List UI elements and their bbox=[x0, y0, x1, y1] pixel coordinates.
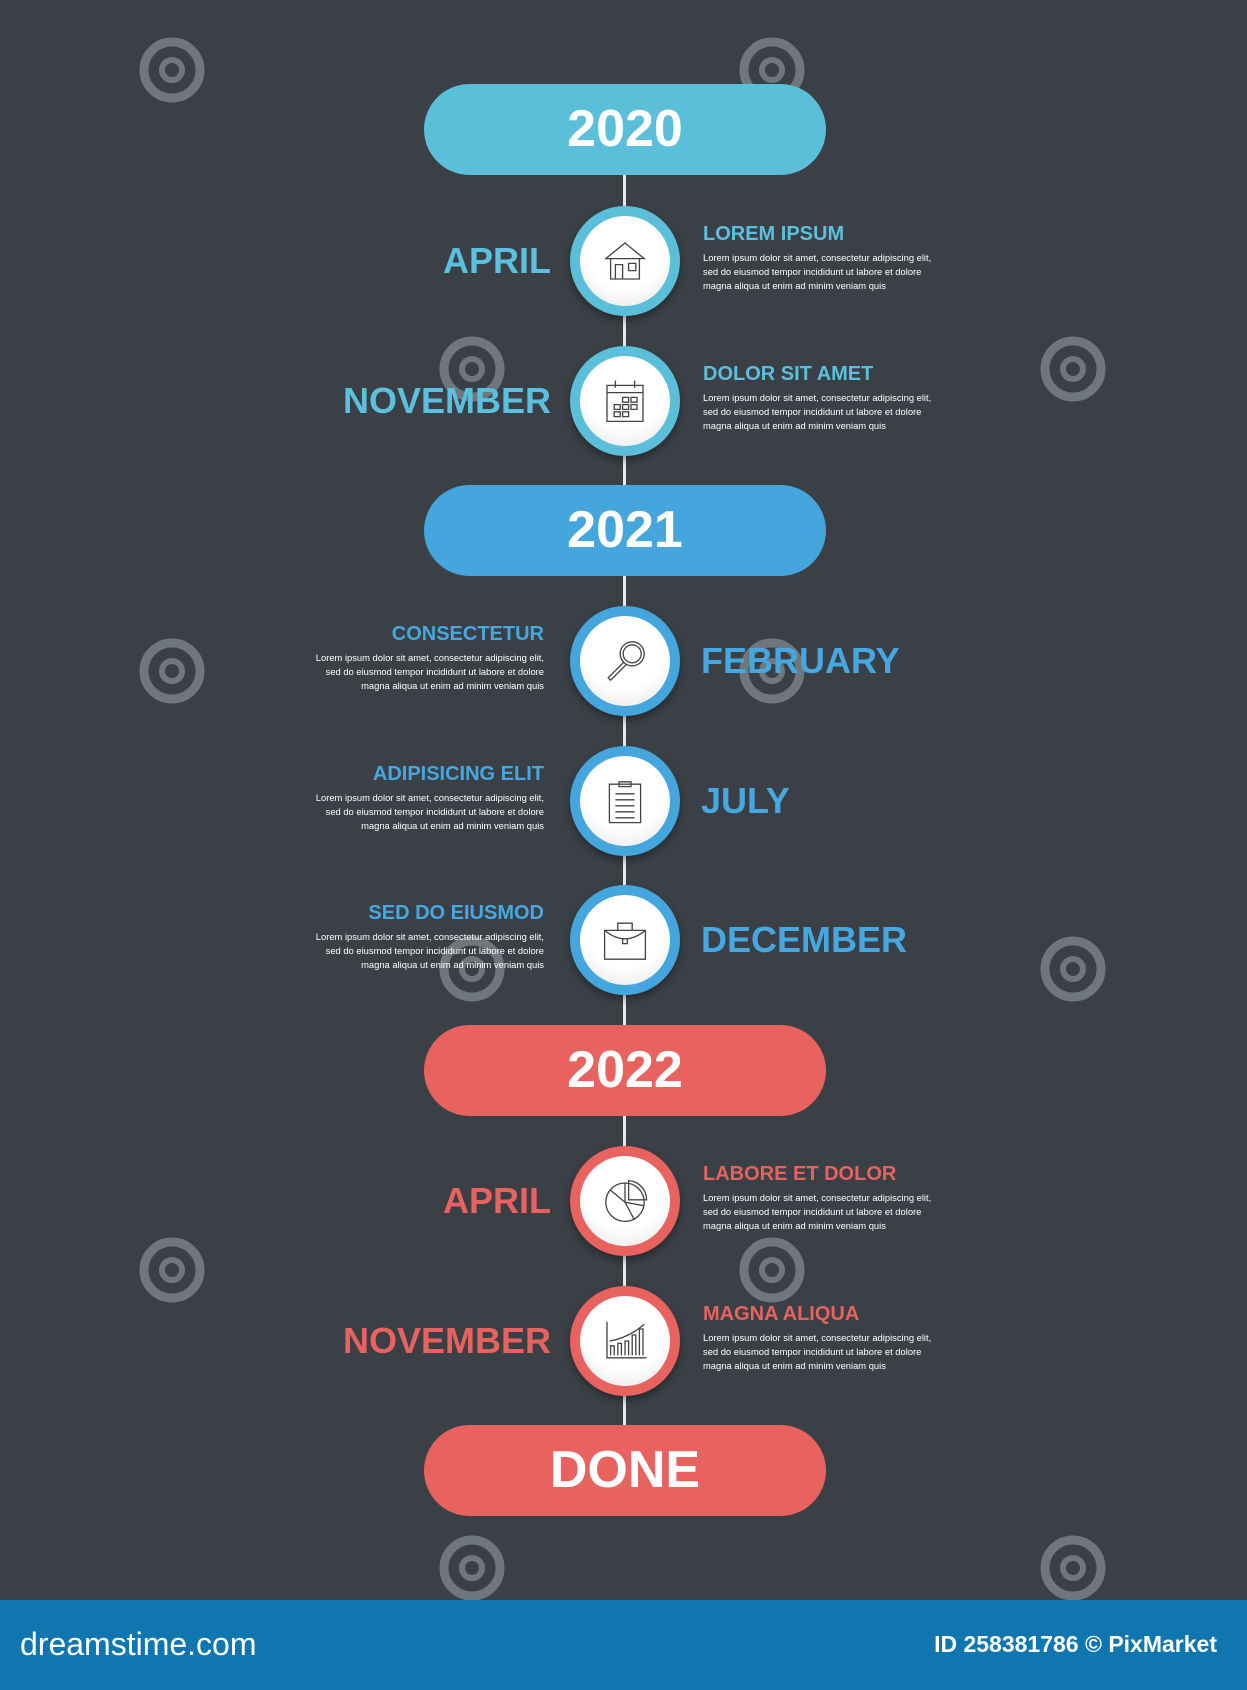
month: april 2022: APRIL bbox=[443, 1180, 551, 1221]
icon circle: clipboard bbox=[570, 746, 680, 856]
done pill bbox=[424, 1425, 826, 1516]
text: adipisicing elit: Lorem ipsum dolor sit amet, consectetur adipiscing elit, bbox=[316, 792, 544, 803]
text: adipisicing elit: sed do eiusmod tempor incididunt ut labore et dolore bbox=[326, 806, 544, 817]
text: dolor sit amet: DOLOR SIT AMET bbox=[703, 363, 873, 385]
footer id: ID 258381786 © PixMarket bbox=[934, 1631, 1217, 1657]
year pill 2022: 2022 bbox=[567, 1041, 683, 1099]
month: november 2020: NOVEMBER bbox=[343, 380, 551, 421]
month: february: FEBRUARY bbox=[701, 640, 900, 681]
text: labore et dolor bbox=[703, 1163, 931, 1231]
month: november 2022: NOVEMBER bbox=[343, 1320, 551, 1361]
year pill 2020: 2020 bbox=[567, 100, 683, 158]
done pill: DONE bbox=[550, 1441, 700, 1499]
month: december: DECEMBER bbox=[701, 919, 907, 960]
text: adipisicing elit: magna aliqua ut enim ad minim veniam quis bbox=[361, 820, 544, 831]
icon circle: magnifier bbox=[570, 606, 680, 716]
text: sed do eiusmod: magna aliqua ut enim ad minim veniam quis bbox=[361, 959, 544, 970]
text: magna aliqua bbox=[703, 1303, 931, 1371]
text: magna aliqua: Lorem ipsum dolor sit amet, consectetur adipiscing elit, bbox=[703, 1332, 931, 1343]
text: sed do eiusmod: Lorem ipsum dolor sit amet, consectetur adipiscing elit, bbox=[316, 931, 544, 942]
icon circle: house bbox=[570, 206, 680, 316]
text: lorem ipsum: magna aliqua ut enim ad minim veniam quis bbox=[703, 280, 886, 291]
text: labore et dolor: magna aliqua ut enim ad minim veniam quis bbox=[703, 1220, 886, 1231]
text: consectetur bbox=[316, 623, 544, 691]
text: dolor sit amet bbox=[703, 363, 931, 431]
month: july: JULY bbox=[701, 780, 790, 821]
text: sed do eiusmod: SED DO EIUSMOD bbox=[368, 902, 544, 924]
text: labore et dolor: LABORE ET DOLOR bbox=[703, 1163, 896, 1185]
text: magna aliqua: sed do eiusmod tempor incididunt ut labore et dolore bbox=[703, 1346, 921, 1357]
text: sed do eiusmod: sed do eiusmod tempor incididunt ut labore et dolore bbox=[326, 945, 544, 956]
year pill 2022 bbox=[424, 1025, 826, 1116]
icon circle: growth chart bbox=[570, 1286, 680, 1396]
text: lorem ipsum: sed do eiusmod tempor incididunt ut labore et dolore bbox=[703, 266, 921, 277]
footer logo: dreamstime.com bbox=[20, 1626, 256, 1662]
text: consectetur: sed do eiusmod tempor incididunt ut labore et dolore bbox=[326, 666, 544, 677]
year pill 2021: 2021 bbox=[567, 501, 683, 559]
timeline line bbox=[623, 150, 626, 1450]
text: consectetur: Lorem ipsum dolor sit amet, consectetur adipiscing elit, bbox=[316, 652, 544, 663]
text: magna aliqua: MAGNA ALIQUA bbox=[703, 1303, 859, 1325]
year pill 2021 bbox=[424, 485, 826, 576]
text: consectetur: CONSECTETUR bbox=[392, 623, 544, 645]
text: lorem ipsum: LOREM IPSUM bbox=[703, 223, 844, 245]
text: labore et dolor: Lorem ipsum dolor sit amet, consectetur adipiscing elit, bbox=[703, 1192, 931, 1203]
text: lorem ipsum bbox=[703, 223, 931, 291]
text: consectetur: magna aliqua ut enim ad minim veniam quis bbox=[361, 680, 544, 691]
icon circle: briefcase bbox=[570, 885, 680, 995]
text: dolor sit amet: sed do eiusmod tempor incididunt ut labore et dolore bbox=[703, 406, 921, 417]
text: adipisicing elit: ADIPISICING ELIT bbox=[373, 763, 544, 785]
text: adipisicing elit bbox=[316, 763, 544, 831]
text: labore et dolor: sed do eiusmod tempor incididunt ut labore et dolore bbox=[703, 1206, 921, 1217]
icon circle: pie chart bbox=[570, 1146, 680, 1256]
text: lorem ipsum: Lorem ipsum dolor sit amet, consectetur adipiscing elit, bbox=[703, 252, 931, 263]
year pill 2020 bbox=[424, 84, 826, 175]
text: sed do eiusmod bbox=[316, 902, 544, 970]
text: magna aliqua: magna aliqua ut enim ad minim veniam quis bbox=[703, 1360, 886, 1371]
text: dolor sit amet: Lorem ipsum dolor sit amet, consectetur adipiscing elit, bbox=[703, 392, 931, 403]
footer bar bbox=[0, 1600, 1247, 1690]
month: april 2020: APRIL bbox=[443, 240, 551, 281]
text: dolor sit amet: magna aliqua ut enim ad minim veniam quis bbox=[703, 420, 886, 431]
icon circle: calendar bbox=[570, 346, 680, 456]
